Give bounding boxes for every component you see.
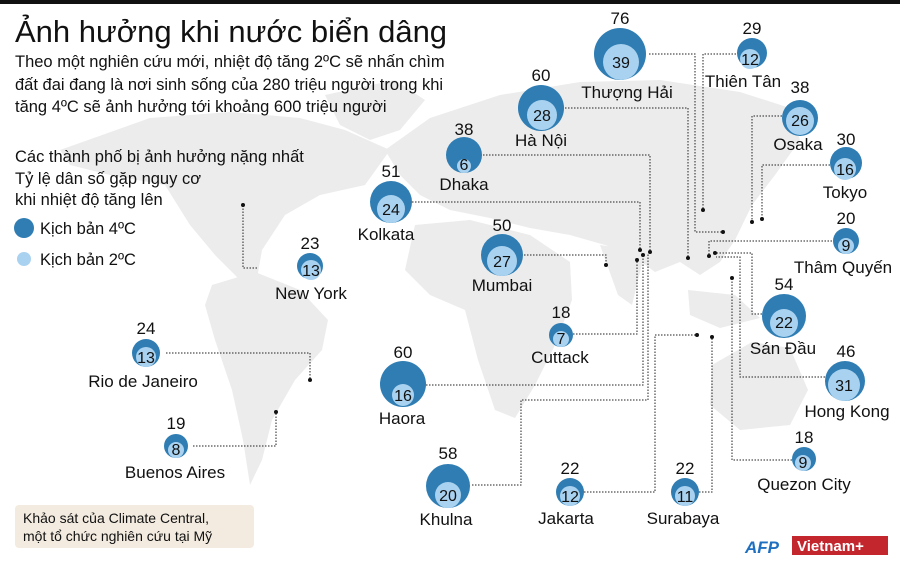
- connector end dots: [241, 203, 764, 414]
- legend: Các thành phố bị ảnh hưởng nặng nhất: [15, 148, 304, 166]
- bubble: Hong Kong: [804, 342, 890, 421]
- bubble: Dhaka: 6: [460, 157, 469, 174]
- bubble: San Dau: Sán Đầu: [750, 339, 816, 358]
- bubble: Quezon City: 18: [795, 428, 813, 447]
- bubble: Quezon City: [757, 428, 851, 494]
- bubble: New York: 23: [301, 234, 319, 253]
- bubble: Thien Tan: 12: [741, 52, 759, 69]
- bubble: Jakarta: 12: [561, 489, 579, 506]
- bubble: Jakarta: Jakarta: [538, 509, 594, 528]
- bubble: Surabaya: 22: [676, 459, 694, 478]
- subtitle text: [15, 53, 445, 116]
- subtitle text: tăng 4ºC sẽ ảnh hưởng tới khoảng 600 triệu người: [15, 98, 387, 116]
- connector lines: [166, 54, 832, 492]
- subtitle text: Theo một nghiên cứu mới, nhiệt độ tăng 2ºC sẽ nhấn chìm: [15, 53, 445, 71]
- bubble: Quezon City: Quezon City: [757, 475, 851, 494]
- bubble: Hong Kong: Hong Kong: [804, 402, 890, 421]
- source note box: Khảo sát của Climate Central,: [23, 510, 209, 526]
- bubble: Thien Tan: 29: [743, 19, 761, 38]
- bubble: Kolkata: Kolkata: [358, 225, 415, 244]
- bubble: Ha Noi: [515, 66, 567, 150]
- bubble: Tham Quyen: [794, 209, 892, 277]
- bubble: Khulna: [420, 444, 473, 529]
- bubble: San Dau: 54: [775, 275, 793, 294]
- bubble: Buenos Aires: Buenos Aires: [125, 463, 225, 482]
- bubble: Rio de Janeiro: 24: [137, 319, 155, 338]
- bubble: Cuttack: 7: [557, 331, 566, 348]
- bubble: Ha Noi: 60: [532, 66, 550, 85]
- bubble: Buenos Aires: 19: [167, 414, 185, 433]
- source note box: [15, 505, 254, 548]
- bubble: Osaka: 38: [791, 78, 809, 97]
- bubble: Thuong Hai: Thượng Hải: [581, 83, 673, 102]
- bubble: Thuong Hai: [581, 9, 673, 102]
- bubble: Rio de Janeiro: [88, 319, 198, 391]
- bubble: San Dau: 22: [775, 315, 793, 332]
- bubble: Hong Kong: 31: [835, 378, 853, 395]
- legend: Tỷ lệ dân số gặp nguy cơ: [15, 170, 201, 188]
- bubble: Dhaka: 38: [455, 120, 473, 139]
- bubble: Surabaya: [647, 459, 720, 528]
- bubble: Haora: [379, 343, 426, 428]
- bubble: Thuong Hai: 39: [612, 55, 630, 72]
- legend: Kịch bản 2ºC: [40, 251, 136, 269]
- logo: AFP Vietnam+: AFP: [744, 538, 780, 557]
- legend: khi nhiệt độ tăng lên: [15, 191, 163, 209]
- bubble: Kolkata: 51: [382, 162, 400, 181]
- bubble: Surabaya: 11: [677, 489, 693, 506]
- bubble: Tham Quyen: Thâm Quyến: [794, 258, 892, 277]
- bubble: Haora: 60: [394, 343, 412, 362]
- bubble: Tokyo: Tokyo: [823, 183, 867, 202]
- bubble: Rio de Janeiro: Rio de Janeiro: [88, 372, 198, 391]
- bubble: New York: New York: [275, 284, 347, 303]
- bubble: Kolkata: [358, 162, 415, 244]
- bubble: New York: 13: [302, 263, 320, 280]
- world map background: [60, 80, 808, 485]
- logo: AFP Vietnam+: [744, 536, 888, 557]
- bubble: Quezon City: 9: [799, 455, 808, 472]
- bubble: Thien Tan: [705, 19, 781, 91]
- logo: AFP Vietnam+: Vietnam+: [797, 538, 864, 555]
- bubble: Buenos Aires: [125, 414, 225, 482]
- bubble: Cuttack: [531, 303, 589, 367]
- title: Ảnh hưởng khi nước biển dâng: [15, 14, 447, 49]
- bubble: Tham Quyen: 20: [837, 209, 855, 228]
- bubble: Mumbai: [472, 216, 532, 295]
- bubble: Cuttack: 18: [552, 303, 570, 322]
- bubble: Osaka: 26: [791, 113, 809, 130]
- bubble: Tokyo: 30: [837, 130, 855, 149]
- bubble: Surabaya: Surabaya: [647, 509, 720, 528]
- bubble: Tokyo: 16: [836, 162, 854, 179]
- source note box: một tổ chức nghiên cứu tại Mỹ: [23, 528, 212, 544]
- bubble: Hong Kong: 46: [837, 342, 855, 361]
- bubble: Dhaka: [439, 120, 489, 194]
- bubble: Mumbai: 27: [493, 254, 511, 271]
- legend: Kịch bản 4ºC: [40, 220, 136, 238]
- bubble: Mumbai: Mumbai: [472, 276, 532, 295]
- bubble: Osaka: Osaka: [773, 135, 823, 154]
- bubble: Tokyo: [823, 130, 867, 202]
- bubble: Thuong Hai: 76: [611, 9, 629, 28]
- bubble: New York: [275, 234, 347, 303]
- bubble: Khulna: 20: [439, 488, 457, 505]
- bubble: Haora: Haora: [379, 409, 426, 428]
- bubble: Mumbai: 50: [493, 216, 511, 235]
- bubble: Khulna: 58: [439, 444, 457, 463]
- bubble: Rio de Janeiro: 13: [137, 350, 155, 367]
- bubble: Ha Noi: 28: [533, 108, 551, 125]
- bubble: Cuttack: Cuttack: [531, 348, 589, 367]
- bubble: Ha Noi: Hà Nội: [515, 131, 567, 150]
- bubble: Haora: 16: [394, 388, 412, 405]
- subtitle text: đất đai đang là nơi sinh sống của 280 triệu người trong khi: [15, 76, 443, 94]
- bubble: Tham Quyen: 9: [842, 238, 851, 255]
- legend: [14, 148, 304, 269]
- bubble: Osaka: [773, 78, 823, 154]
- bubble: San Dau: [750, 275, 816, 358]
- bubble: Buenos Aires: 8: [172, 442, 181, 459]
- bubble: Khulna: Khulna: [420, 510, 473, 529]
- bubble: Kolkata: 24: [382, 202, 400, 219]
- bubble: Dhaka: Dhaka: [439, 175, 489, 194]
- bubble: Jakarta: [538, 459, 594, 528]
- bubble: Thien Tan: Thiên Tân: [705, 72, 781, 91]
- bubble: Jakarta: 22: [561, 459, 579, 478]
